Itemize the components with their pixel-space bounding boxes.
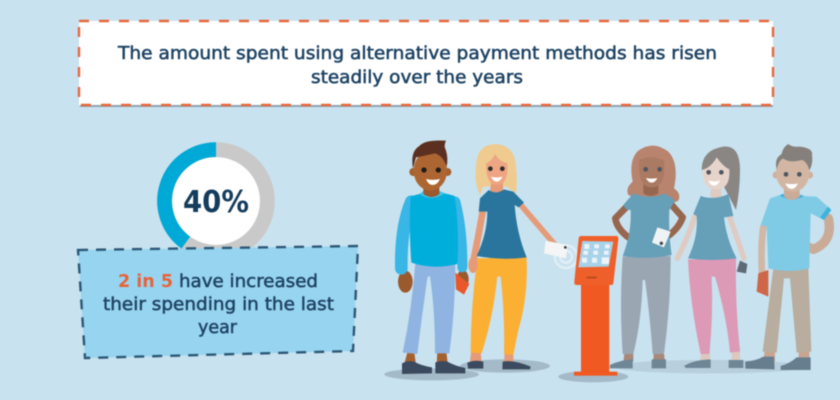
title text: The amount spent using alternative payment methods has risen (117, 43, 717, 64)
man in blue sweater (398, 140, 469, 374)
callout text: year (198, 317, 238, 338)
woman with ponytail (677, 147, 747, 368)
payment kiosk (574, 236, 618, 376)
callout text: their spending in the last (103, 294, 334, 315)
callout text: have increased (179, 271, 318, 292)
statistic callout (78, 246, 358, 358)
callout text (103, 271, 334, 338)
floor shadows (384, 359, 628, 382)
title box (79, 21, 773, 107)
donut chart 40% (165, 150, 267, 252)
people and kiosk, left group (384, 140, 628, 382)
percentage: 40% (183, 185, 249, 220)
contactless payment card (544, 241, 579, 269)
title text (117, 43, 717, 88)
woman with long brown hair (610, 146, 683, 368)
floor shadow (613, 360, 807, 373)
people, right group faded (610, 144, 831, 373)
woman in teal top (467, 144, 557, 369)
man in light blue t-shirt (745, 144, 831, 370)
callout text: 2 in 5 (118, 271, 173, 292)
title text: steadily over the years (311, 67, 523, 88)
